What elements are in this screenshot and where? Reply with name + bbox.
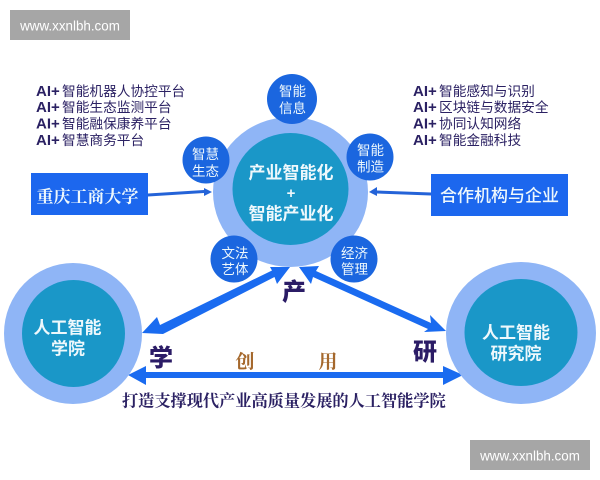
left circle: 人工智能学院: 人工智能 — [34, 318, 102, 338]
watermark bottom right: www.xxnlbh.com — [479, 448, 580, 464]
box: 合作机构与企业 — [431, 174, 568, 216]
label: 学: 学 — [149, 344, 173, 372]
node: 智慧生态: 智慧 — [192, 147, 219, 162]
arrow: university to hub — [148, 188, 212, 196]
right circle: 人工智能研究院: 研究院 — [490, 344, 542, 364]
text block: left AI platforms: AI+ — [36, 83, 60, 100]
text block: right AI technologies: AI+ — [413, 83, 437, 100]
text block: left AI platforms: AI+ — [36, 116, 60, 132]
text block: left AI platforms: 智能生态监测平台 — [62, 100, 172, 115]
label: 产: 产 — [282, 279, 306, 306]
central hub circle: 产业智能化 — [248, 162, 334, 182]
text block: left AI platforms: 智慧商务平台 — [62, 133, 144, 148]
right circle: 人工智能研究院 — [446, 262, 596, 404]
text block: left AI platforms — [36, 83, 185, 149]
node: 文法艺体 — [210, 236, 258, 282]
node: 智能信息 — [267, 74, 317, 124]
text block: right AI technologies: AI+ — [413, 116, 437, 132]
node: 文法艺体: 艺体 — [222, 262, 249, 277]
box: 合作机构与企业: 合作机构与企业 — [440, 186, 559, 206]
label: 用: 用 — [318, 351, 338, 373]
text block: right AI technologies: AI+ — [413, 99, 437, 116]
double arrow: 研 to 产 — [299, 266, 446, 332]
label: 研: 研 — [413, 339, 437, 366]
double arrow: 学 to 产 — [142, 267, 290, 334]
watermark bottom right — [470, 440, 590, 470]
right circle: 人工智能研究院: 人工智能 — [482, 322, 550, 342]
node: 经济管理: 管理 — [341, 262, 368, 277]
text block: right AI technologies: AI+ — [413, 132, 437, 149]
box: 重庆工商大学: 重庆工商大学 — [36, 188, 138, 206]
text block: left AI platforms: AI+ — [36, 99, 60, 116]
central hub circle: 智能产业化 — [248, 204, 334, 224]
text block: right AI technologies: 智能金融科技 — [439, 133, 521, 148]
watermark top left: www.xxnlbh.com — [19, 18, 120, 34]
text block: left AI platforms: 智能融保康养平台 — [62, 116, 172, 132]
slogan: 打造支撑现代产业高质量发展的人工智能学院 — [122, 392, 446, 410]
double arrow: 创用 horizontal — [128, 366, 463, 385]
node: 文法艺体: 文法 — [222, 246, 248, 261]
node: 智能信息: 信息 — [279, 100, 306, 116]
text block: left AI platforms: 智能机器人协控平台 — [62, 84, 185, 99]
text block: left AI platforms: AI+ — [36, 132, 60, 149]
central hub circle — [213, 117, 368, 267]
node: 智慧生态: 生态 — [192, 164, 219, 179]
box: 重庆工商大学 — [31, 173, 148, 215]
node: 智慧生态 — [182, 136, 230, 184]
label: 创: 创 — [235, 350, 255, 373]
arrow: partners to hub — [369, 187, 431, 196]
node: 经济管理 — [330, 236, 378, 282]
watermark top left — [10, 10, 130, 40]
node: 智能制造 — [346, 134, 394, 180]
central hub circle: + — [287, 185, 296, 202]
text block: right AI technologies: 智能感知与识别 — [439, 83, 535, 99]
node: 经济管理: 经济 — [341, 246, 368, 261]
node: 智能信息: 智能 — [279, 84, 306, 99]
node: 智能制造: 制造 — [357, 160, 384, 174]
text block: right AI technologies — [413, 83, 549, 149]
node: 智能制造: 智能 — [357, 143, 384, 158]
text block: right AI technologies: 区块链与数据安全 — [439, 99, 549, 115]
left circle: 人工智能学院 — [4, 263, 142, 404]
text block: right AI technologies: 协同认知网络 — [439, 116, 521, 132]
left circle: 人工智能学院: 学院 — [51, 338, 85, 358]
